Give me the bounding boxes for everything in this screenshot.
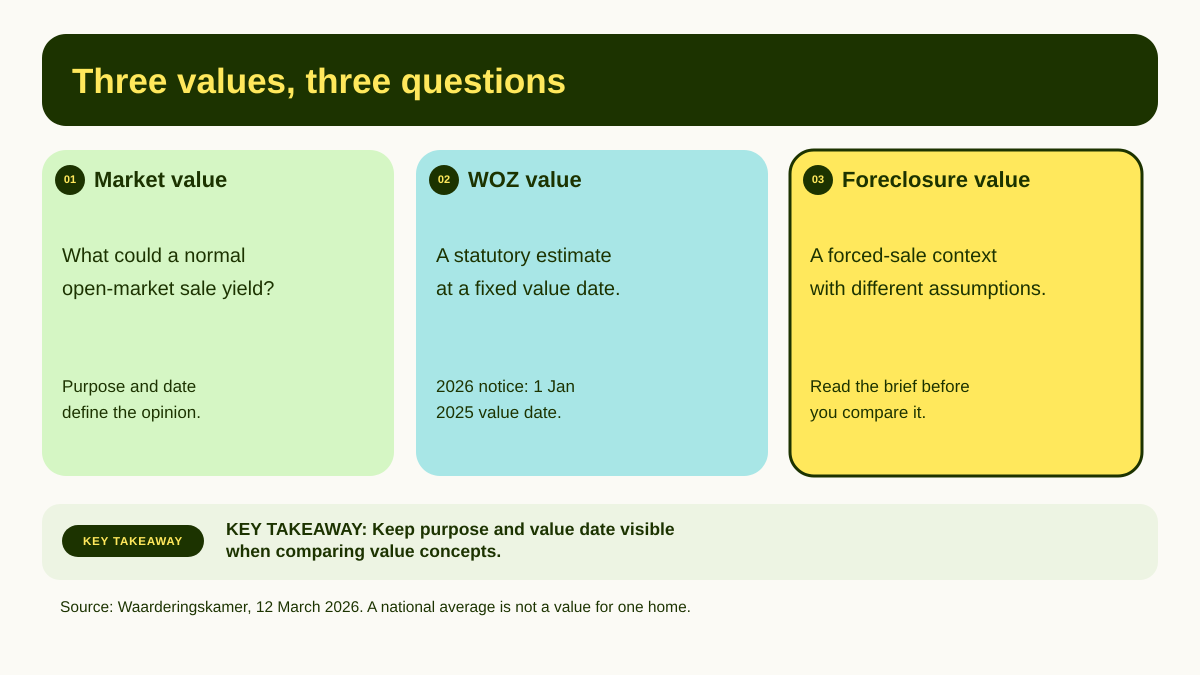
note text: define the opinion.	[62, 403, 201, 422]
question text: A forced-sale context	[810, 245, 997, 267]
panel: key takeaway	[42, 504, 1158, 580]
title: Three values, three questions	[72, 62, 566, 101]
panel: WOZ value	[416, 150, 768, 476]
note text: 2025 value date.	[436, 403, 562, 422]
badge 03	[803, 165, 833, 195]
question text: with different assumptions.	[810, 278, 1046, 300]
note text	[810, 377, 970, 422]
question text	[810, 245, 1046, 300]
badge 03: 03	[812, 174, 824, 186]
note text: 2026 notice: 1 Jan	[436, 377, 575, 396]
question text: at a fixed value date.	[436, 278, 621, 300]
heading: market value: Market value	[94, 167, 227, 192]
note text: Read the brief before	[810, 377, 970, 396]
heading: foreclosure value: Foreclosure value	[842, 167, 1030, 192]
note text: you compare it.	[810, 403, 926, 422]
heading: WOZ value: WOZ value	[468, 167, 582, 192]
note text	[62, 377, 201, 422]
badge 01	[55, 165, 85, 195]
panel: market value	[42, 150, 394, 476]
takeaway text: when comparing value concepts.	[226, 541, 501, 561]
question text	[62, 245, 274, 300]
badge 01: 01	[64, 174, 76, 186]
takeaway text: KEY TAKEAWAY: Keep purpose and value date visible	[226, 519, 675, 539]
title banner	[42, 34, 1158, 126]
question text	[436, 245, 621, 300]
panel: foreclosure value	[788, 148, 1144, 478]
badge 02	[429, 165, 459, 195]
question text: open-market sale yield?	[62, 278, 274, 300]
question text: A statutory estimate	[436, 245, 612, 267]
question text: What could a normal	[62, 245, 245, 267]
badge 02: 02	[438, 174, 450, 186]
key takeaway pill: KEY TAKEAWAY	[83, 536, 183, 548]
takeaway text	[226, 519, 675, 561]
source note: Source: Waarderingskamer, 12 March 2026. A national average is not a value for one home.	[60, 599, 691, 616]
note text: Purpose and date	[62, 377, 196, 396]
key takeaway pill	[62, 525, 204, 557]
note text	[436, 377, 575, 422]
